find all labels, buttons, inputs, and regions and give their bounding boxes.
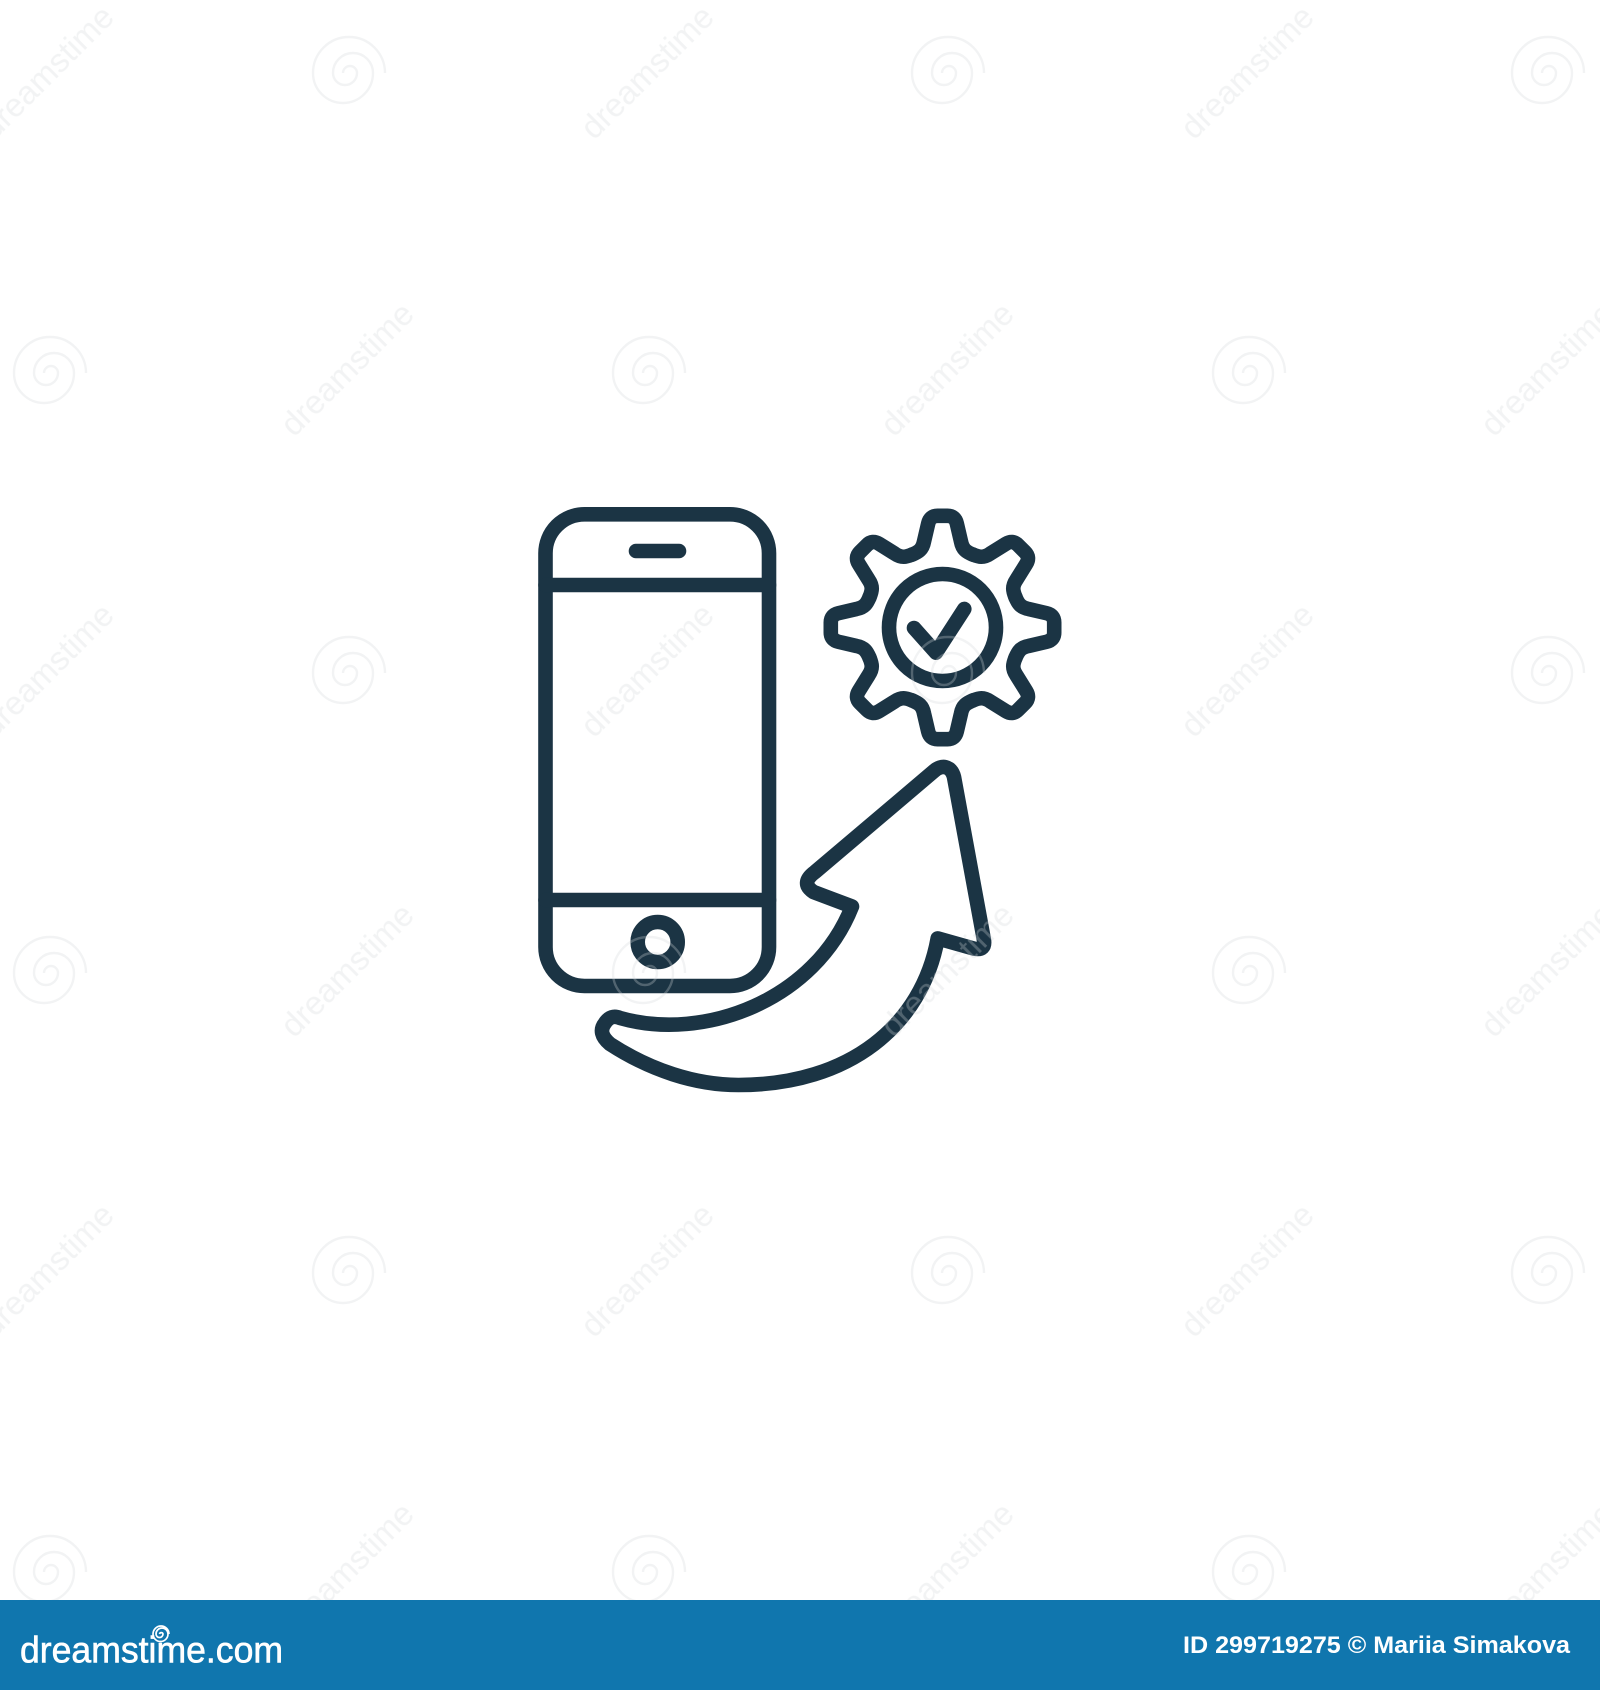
logo text: dreamstime.com: dreamstime.com (20, 1630, 283, 1671)
watermark: repeating spirals and diagonal text: dreamstime (573, 596, 721, 744)
arrow: curved upward arrow (602, 767, 984, 1085)
watermark: repeating spirals and diagonal text: dreamstime (1173, 1196, 1321, 1344)
watermark: repeating spirals and diagonal text: dreamstime (1173, 596, 1321, 744)
watermark: repeating spirals and diagonal text: dreamstime (573, 0, 721, 146)
watermark: repeating spirals and diagonal text: dreamstime (273, 1495, 421, 1643)
watermark: repeating spirals and diagonal text: dreamstime (273, 295, 421, 443)
icon: logo spiral (153, 1626, 169, 1642)
watermark: repeating spirals and diagonal text: dreamstime (873, 1495, 1021, 1643)
watermark: repeating spirals and diagonal text: dreamstime (873, 295, 1021, 443)
credit: image ID and author: ID 299719275 © Mariia Simakova (1183, 1632, 1571, 1659)
icon: smartphone (546, 514, 769, 986)
watermark: repeating spirals and diagonal text: dreamstime (873, 896, 1021, 1044)
watermark: repeating spirals and diagonal text: dreamstime (273, 896, 421, 1044)
watermark: repeating spirals and diagonal text: dreamstime (573, 1196, 721, 1344)
icon: gear with check mark (831, 516, 1054, 739)
watermark: repeating spirals and diagonal text: dreamstime (1173, 0, 1321, 146)
footer banner (0, 1600, 1600, 1690)
